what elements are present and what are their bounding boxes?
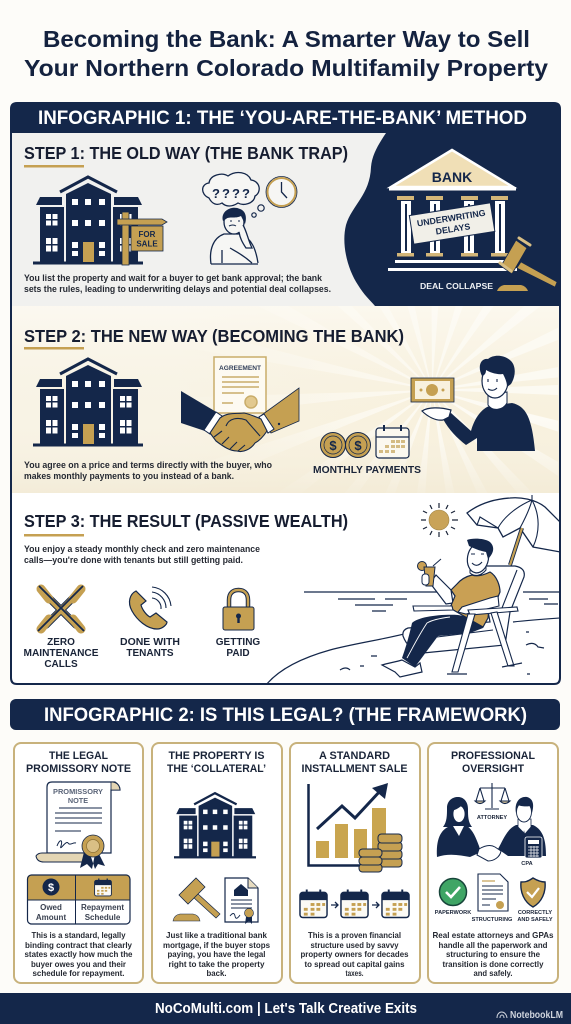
title: Your Northern Colorado Multifamily Property <box>24 55 548 81</box>
label: getting paid: GETTING <box>216 637 260 648</box>
step 2 description: You agree on a price and terms directly with the buyer, who <box>24 459 272 470</box>
icon: apartment building <box>33 359 143 446</box>
card: the legal promissory note <box>14 743 143 983</box>
label: done with tenants: TENANTS <box>126 648 174 659</box>
card title: THE PROPERTY IS <box>168 750 265 762</box>
label: zero maintenance calls: CALLS <box>44 659 78 670</box>
step 3 section <box>24 495 566 685</box>
icon: shield <box>521 878 545 907</box>
card text: handle all the paperwork and <box>438 940 548 950</box>
panel: infographic 1 <box>11 90 571 690</box>
card title: THE LEGAL <box>49 750 108 762</box>
title <box>24 26 548 81</box>
card title <box>26 750 132 775</box>
step 2 heading: STEP 2: THE NEW WAY (BECOMING THE BANK) <box>24 326 404 346</box>
icon: bank building with underwriting delays sign: BANK <box>432 169 472 185</box>
card text: binding contract that clearly <box>25 940 132 950</box>
label: getting paid: PAID <box>226 648 250 659</box>
card title <box>302 750 408 775</box>
card: the property is the collateral <box>152 743 282 983</box>
icon: gavel <box>497 238 557 291</box>
label: done with tenants <box>120 637 180 659</box>
card text <box>24 930 133 978</box>
table: owed amount and repayment schedule: Owed <box>40 903 62 912</box>
card text: This is a proven financial <box>308 930 401 940</box>
label: monthly payments: MONTHLY PAYMENTS <box>313 464 421 476</box>
card text <box>432 930 554 978</box>
card text: structure used by savvy <box>310 940 399 950</box>
icon: coins and calendar: $ <box>329 438 337 453</box>
card title <box>451 750 535 775</box>
icon: agreement document <box>214 357 266 413</box>
beach lines <box>266 592 560 685</box>
icon: apartment building with for sale sign <box>33 177 167 265</box>
label: deal collapse: DEAL COLLAPSE <box>420 281 493 291</box>
card text: taxes. <box>346 968 364 978</box>
step 3 description: You enjoy a steady monthly check and zero maintenance <box>24 543 260 554</box>
label: correctly and safely: CORRECTLY <box>518 910 552 916</box>
table: owed amount and repayment schedule: $ <box>48 882 54 894</box>
label: structuring: STRUCTURING <box>472 917 512 923</box>
label: attorney: ATTORNEY <box>477 815 507 821</box>
icon: cocktail <box>418 559 441 586</box>
lounge chair <box>403 566 524 653</box>
card text: schedule for repayment. <box>32 968 124 978</box>
card text: to spread out capital gains <box>304 959 405 969</box>
illustration: attorney and CPA shaking hands <box>437 797 546 861</box>
icon: bank building with underwriting delays sign: DELAYS <box>435 221 471 237</box>
step 2 section <box>12 306 559 493</box>
card title: OVERSIGHT <box>462 763 524 775</box>
step 2 description: makes monthly payments to you instead of a bank. <box>24 470 234 481</box>
icon: promissory note scroll: NOTE <box>68 796 88 805</box>
card text <box>300 930 409 978</box>
chart: rising bars and arrow with coins <box>308 783 402 872</box>
icon: bank building with underwriting delays sign <box>388 150 517 271</box>
icon: calendars sequence <box>300 890 409 918</box>
icon: beach umbrella <box>467 495 566 565</box>
panel frame <box>11 103 560 684</box>
table: owed amount and repayment schedule: Repayment <box>81 903 124 912</box>
icon: coins and calendar: $ <box>354 438 362 453</box>
table: owed amount and repayment schedule: Amount <box>36 913 66 922</box>
chair legs and armrest <box>413 606 518 615</box>
icon: apartment building with for sale sign: FOR <box>139 230 156 239</box>
card text: transition is done correctly <box>442 959 544 969</box>
label: getting paid <box>216 637 260 659</box>
icon: sun <box>421 503 458 537</box>
illustration: man relaxing on the beach <box>266 495 566 685</box>
heading: infographic 2 <box>10 699 560 730</box>
label: correctly and safely <box>517 910 553 923</box>
icon: person holding cash <box>411 356 535 451</box>
step 1 description: sets the rules, leading to underwriting delays and potential deal collapses. <box>24 283 331 294</box>
card text: This is a standard, legally <box>32 930 126 940</box>
card text: buyer owes you and their <box>31 959 127 969</box>
icon: crossed wrenches <box>38 586 84 631</box>
card text: right to take the property <box>168 959 265 969</box>
step 1 description: You list the property and wait for a buyer to get bank approval; the bank <box>24 272 323 283</box>
table: owed amount and repayment schedule: Schedule <box>85 913 121 922</box>
step 3 heading: STEP 3: THE RESULT (PASSIVE WEALTH) <box>24 511 348 531</box>
step 1 description <box>24 272 331 294</box>
icon: worried person with thought bubble and clock: ???? <box>212 186 250 201</box>
icon: gavel <box>173 878 220 921</box>
icon: handshake <box>181 388 299 452</box>
icon: coins and calendar <box>320 425 409 458</box>
man <box>382 539 500 677</box>
card: a standard installment sale <box>290 743 420 983</box>
step 1 section <box>12 133 559 306</box>
card text <box>163 930 270 978</box>
card text: structuring to ensure the <box>446 949 540 959</box>
card text: states exactly how much the <box>24 949 133 959</box>
step 3 description: calls—you're done with tenants but still getting paid. <box>24 554 243 565</box>
panel heading: INFOGRAPHIC 1: THE ‘YOU-ARE-THE-BANK’ METHOD <box>38 107 527 129</box>
footer text: NoCoMulti.com | Let's Talk Creative Exits <box>155 1001 417 1017</box>
footer <box>0 993 571 1024</box>
sunburst rays <box>272 318 558 477</box>
step 1 heading: STEP 1: THE OLD WAY (THE BANK TRAP) <box>24 143 348 163</box>
label: paperwork: PAPERWORK <box>435 910 471 916</box>
label: zero maintenance calls <box>24 637 99 670</box>
icon: agreement document: AGREEMENT <box>219 365 262 372</box>
icon: promissory note scroll: PROMISSORY <box>53 787 103 796</box>
title: Becoming the Bank: A Smarter Way to Sell <box>43 26 530 52</box>
card text: property owners for decades <box>300 949 409 959</box>
card title: INSTALLMENT SALE <box>302 763 408 775</box>
step 3 description <box>24 543 260 565</box>
card title: A STANDARD <box>319 750 390 762</box>
icon: ringing phone <box>129 587 171 629</box>
icon: apartment building with for sale sign: SALE <box>136 240 158 248</box>
notebooklm logo: NotebookLM <box>510 1010 563 1021</box>
card text: paying, you have the legal <box>168 949 266 959</box>
panel heading <box>11 103 560 133</box>
label: done with tenants: DONE WITH <box>120 637 180 648</box>
icon: scales <box>475 783 510 809</box>
label: correctly and safely: AND SAFELY <box>517 917 553 923</box>
card text: Just like a traditional bank <box>166 930 267 940</box>
card text: Real estate attorneys and GPAs <box>432 930 554 940</box>
card text: and safely. <box>474 968 512 978</box>
navy blob backdrop <box>344 133 559 306</box>
card title: THE ‘COLLATERAL’ <box>167 763 266 775</box>
card title: PROMISSORY NOTE <box>26 763 132 775</box>
card text: mortgage, if the buyer stops <box>163 940 270 950</box>
step 2 description <box>24 459 272 481</box>
card title <box>167 750 266 775</box>
label: CPA: CPA <box>521 861 533 867</box>
icon: promissory note scroll <box>36 782 120 869</box>
card: professional oversight <box>428 743 558 983</box>
icon: worried person with thought bubble and clock <box>203 173 297 264</box>
heading: infographic 2: INFOGRAPHIC 2: IS THIS LEGAL? (THE FRAMEWORK) <box>44 704 527 726</box>
table: owed amount and repayment schedule <box>27 875 130 924</box>
card text: back. <box>206 968 226 978</box>
icon: property deed <box>225 878 258 924</box>
icon: structuring document <box>478 874 508 911</box>
label: zero maintenance calls: MAINTENANCE <box>24 648 99 659</box>
icon: padlock <box>223 590 254 630</box>
icon: apartment building <box>174 793 256 858</box>
icon: bank building with underwriting delays sign: UNDERWRITING <box>416 208 486 228</box>
label: zero maintenance calls: ZERO <box>47 637 75 648</box>
card title: PROFESSIONAL <box>451 750 535 762</box>
icon: green check <box>440 878 466 906</box>
